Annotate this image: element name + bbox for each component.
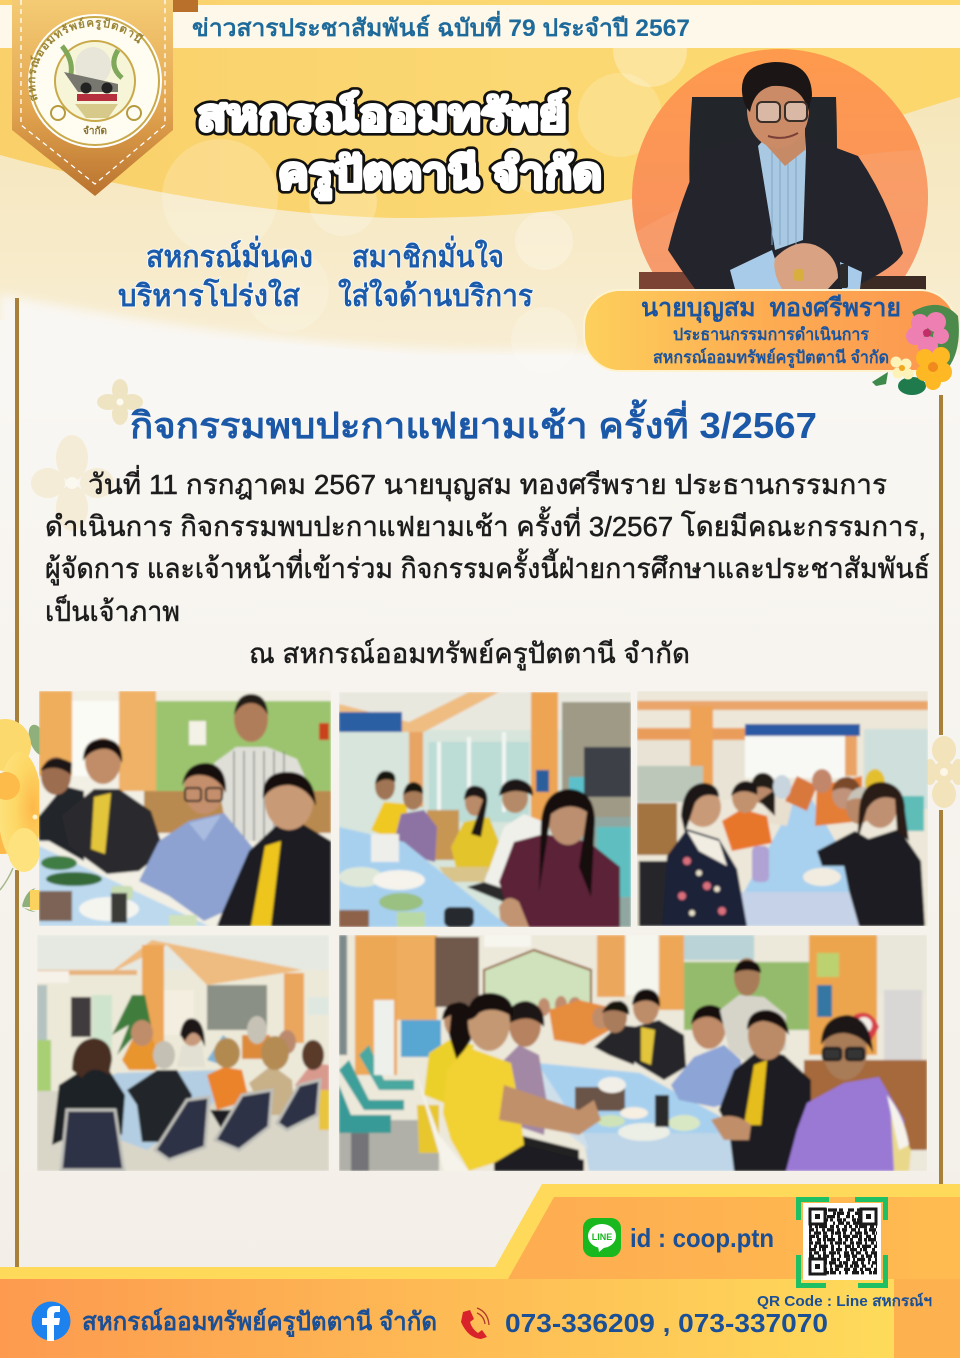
chair white bbox=[414, 1067, 469, 1171]
standing man bbox=[214, 747, 307, 841]
body text: เป็นเจ้าภาพ bbox=[45, 594, 180, 627]
chair bbox=[639, 861, 667, 926]
title: organisation name: สหกรณ์ออมทรัพย์ bbox=[197, 91, 567, 140]
name plate: สหกรณ์ออมทรัพย์ครูปัตตานี จำกัด bbox=[653, 347, 889, 369]
white shirt man bbox=[481, 814, 544, 892]
text: Facebook page: สหกรณ์ออมทรัพย์ครูปัตตานี จำกัด bbox=[82, 1307, 437, 1338]
logo ribbon bbox=[12, 0, 198, 196]
front-row guests in background bbox=[122, 1038, 162, 1070]
gray haired man bbox=[817, 831, 872, 866]
chairman blue shirt bbox=[139, 813, 254, 921]
man front right bbox=[217, 823, 331, 926]
icon: cooperative seal bbox=[28, 14, 162, 148]
icon: telephone bbox=[461, 1308, 489, 1339]
body text: ผู้จัดการ และเจ้าหน้าที่เข้าร่วม กิจกรรมครั้งนี้ฝ่ายการศึกษาและประชาสัมพันธ์ bbox=[45, 548, 930, 586]
neck and head bbox=[766, 120, 805, 166]
title: organisation name: ครูปัตตานี จำกัด bbox=[278, 150, 602, 200]
text: telephone numbers: 073-336209 , 073-337070 bbox=[505, 1308, 828, 1338]
cuffs and hands bbox=[730, 250, 785, 289]
photo 4: diners seen from behind bbox=[37, 935, 329, 1171]
table bbox=[339, 827, 509, 927]
desk bbox=[639, 272, 699, 290]
table bbox=[39, 846, 209, 926]
photo 5: group photo at long table bbox=[339, 935, 927, 1171]
woman in yellow bbox=[424, 1040, 474, 1105]
ornament: small near heading bbox=[97, 379, 143, 425]
decorative yellow flower at left bbox=[0, 719, 51, 912]
back row bbox=[538, 996, 582, 1017]
header background: yellow and cream waves bbox=[0, 0, 960, 420]
icon: tropical flowers bbox=[872, 305, 959, 395]
yellow shirt man bbox=[443, 1047, 524, 1171]
woman in maroon bbox=[499, 834, 620, 927]
title: organisation name bbox=[197, 91, 602, 200]
ornament: large behind body text bbox=[31, 435, 114, 531]
icon: cooperative seal: สหกรณ์ออมทรัพย์ครูปัตตานี bbox=[28, 17, 144, 102]
chairs bbox=[61, 1110, 124, 1170]
chairman bbox=[671, 1045, 741, 1107]
photo 1: chairman with committee members bbox=[39, 691, 331, 926]
guest backs bbox=[52, 1067, 125, 1145]
text: QR caption: QR Code : Line สหกรณ์ฯ bbox=[757, 1292, 932, 1310]
name plate: นายบุญสม ทองศรีพราย bbox=[641, 294, 901, 324]
body text bbox=[45, 465, 930, 671]
purple patterned shirt man bbox=[499, 1045, 547, 1135]
table bbox=[57, 1070, 217, 1150]
seated men centre bbox=[594, 1025, 639, 1065]
woman orange uniform bbox=[722, 809, 772, 851]
chair bbox=[689, 97, 837, 200]
title: organisation name: ครูปัตตานี จำกัด bbox=[278, 150, 602, 200]
header strip: newsletter title bbox=[0, 5, 960, 48]
man in black jacket bbox=[719, 1050, 811, 1171]
man in purple shirt bbox=[786, 1077, 904, 1171]
title: organisation name: สหกรณ์ออมทรัพย์ bbox=[197, 91, 567, 140]
ornament: right edge bbox=[923, 736, 960, 808]
name plate bbox=[584, 290, 956, 371]
standing man bbox=[720, 995, 786, 1060]
portrait: chairman bbox=[632, 49, 928, 290]
photo 3: long table view bbox=[637, 691, 928, 926]
slogan: สหกรณ์มั่นคง bbox=[146, 235, 313, 274]
yellow shirt man bbox=[371, 802, 407, 842]
woman black jacket bbox=[844, 829, 925, 926]
plant bbox=[112, 995, 152, 1055]
text: LINE id: id : coop.ptn bbox=[630, 1223, 774, 1253]
frame lines bbox=[15, 298, 943, 1268]
body text: ณ สหกรณ์ออมทรัพย์ครูปัตตานี จำกัด bbox=[249, 638, 690, 671]
icon: cooperative seal: จำกัด bbox=[83, 125, 107, 137]
woman floral dress bbox=[662, 829, 747, 926]
shirt bbox=[758, 135, 806, 250]
purple shirt man bbox=[394, 810, 437, 862]
left man bbox=[39, 786, 84, 861]
bokeh circles bbox=[162, 13, 687, 373]
icon: Facebook bbox=[32, 1302, 70, 1341]
slogan: สมาชิกมั่นใจ bbox=[352, 235, 504, 274]
slogan bbox=[118, 235, 533, 313]
icon: LINE bbox=[583, 1218, 621, 1257]
header strip: newsletter title: ข่าวสารประชาสัมพันธ์ ฉบับที่ 79 ประจำปี 2567 bbox=[192, 10, 690, 42]
jacket bbox=[668, 136, 903, 289]
body text: วันที่ 11 กรกฎาคม 2567 นายบุญสม ทองศรีพราย ประธานกรรมการ bbox=[88, 465, 887, 502]
name plate: ประธานกรรมการดำเนินการ bbox=[673, 325, 870, 344]
back-row diners bbox=[767, 791, 792, 826]
floor and teal chairs bbox=[339, 1120, 439, 1171]
table and cloth bbox=[537, 1063, 751, 1133]
man in black jacket bbox=[62, 789, 164, 874]
table and cloth bbox=[744, 796, 864, 892]
footer panel with Line contact bbox=[0, 1184, 960, 1358]
QR code bbox=[798, 1200, 886, 1286]
slogan: ใส่ใจด้านบริการ bbox=[338, 278, 533, 313]
slogan: บริหารโปร่งใส bbox=[118, 277, 301, 313]
body text: ดำเนินการ กิจกรรมพบปะกาแฟยามเช้า ครั้งที่ 3/2567 โดยมีคณะกรรมการ, bbox=[45, 506, 926, 542]
icon: LINE: LINE bbox=[592, 1232, 612, 1242]
yellow shirt woman bbox=[451, 817, 499, 872]
photo 2: staff seated at table bbox=[339, 692, 631, 927]
activity heading: กิจกรรมพบปะกาแฟยามเช้า ครั้งที่ 3/2567 bbox=[130, 399, 817, 446]
